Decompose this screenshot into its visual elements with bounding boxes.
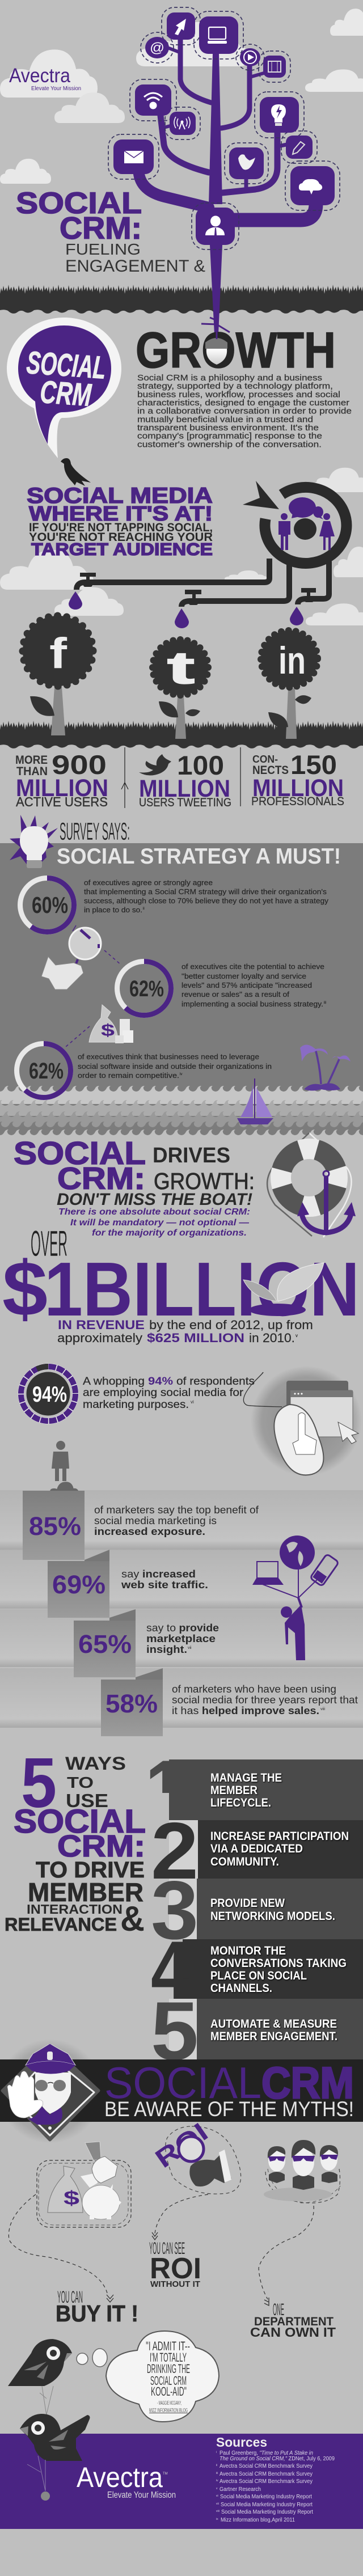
heading: 5 ways to use social CRM: CRM: [57,1829,145,1863]
text: 58 percent: it has helped improve sales. [172,1705,319,1716]
stat ring: 62 percent competitive: 62% [29,1059,64,1084]
myth 2: ROI magnifier [150,2117,241,2194]
stat: Facebook 900 million: ACTIVE USERS [16,794,108,809]
text: 62 percent customer loyalty [182,963,326,1008]
icon: magnifier with hand [41,925,101,989]
text: 65 percent: marketplace [146,1633,216,1644]
tree: Facebook: f [49,629,67,678]
myth 3 label: one department can own it [250,2300,336,2340]
executive right [320,2145,338,2183]
tree: LinkedIn [261,631,318,739]
clouds: sky top [0,9,363,184]
myth 3 label: one department can own it: ONE [273,2300,284,2319]
water drops [69,591,303,628]
text: 62 percent customer loyalty: of executives cite the potential to achieve [182,963,324,971]
icon: at sign: @ [150,40,164,56]
stat: LinkedIn 150 million: PROFESSIONALS [251,795,344,808]
icon: bird [229,147,264,179]
myth 2 label: you can see ROI without it [149,2239,201,2289]
heading: over $1 billion: OVER [31,1223,67,1264]
logo: Avectra footer: TM [163,2472,168,2476]
leaf [30,696,54,716]
title: Social CRM fueling engagement: CRM: [60,210,142,246]
heading: 5 ways to use social CRM: USE [66,1790,108,1811]
text: 60 percent: of executives agree or strongly agree [84,879,213,887]
text: 94 percent [83,1375,255,1411]
stat disc: 94 percent: 94% [32,1382,67,1407]
text: SURVEY SAYS: [60,818,130,845]
tag: 69 percent: 69% [52,1570,105,1599]
text block: definition of Social CRM: Social CRM is a philosophy and a business [137,373,322,383]
icon: woman [319,513,335,550]
text: 60 percent: that implementing a Social CRM strategy will drive their organization's [84,888,327,896]
thought cloud: quote: SOCIAL CRM [150,2374,187,2388]
thought bubbles [77,2349,107,2367]
clouds: middle [0,468,363,625]
icon: speech bubbles [289,497,323,519]
fold shadows between tags [85,1550,163,1680]
heading: 5 ways to use social CRM: SOCIAL [14,1803,146,1840]
sources: vi [216,2494,218,2498]
dashed path: myth 3 [259,2206,314,2299]
text: 62 percent competitive: iv [180,1073,182,1076]
text: 94 percent: A whopping [83,1375,145,1388]
bird on heading [61,458,91,486]
myth 2 label: you can see ROI without it: WITHOUT IT [150,2279,200,2289]
heading: GROWTH with acorn: GROWTH [136,322,336,378]
heading: social media where it's at: WHERE IT'S AT! [29,502,213,525]
icon: lifebuoy and anchor [267,1133,356,1237]
sources: Paul Greenberg, "Time to Put A Stake in [220,2450,313,2456]
step 3: networking [151,1864,363,1956]
sources: vii [216,2502,219,2506]
text: 94 percent: vi [191,1399,194,1405]
text block: definition of Social CRM: characteristics, designed to engage the customer [137,398,349,408]
icon: chevron myth 3 [264,2298,269,2306]
stat: Twitter 100 million: 100 [177,750,224,780]
text block: definition of Social CRM: company's [programmatic] response to the [137,432,322,441]
panel: myths band: SOCIAL [104,2058,261,2108]
stat: LinkedIn 150 million: MILLION [252,775,344,802]
stat: Facebook 900 million [15,750,108,809]
icon: man [278,513,290,550]
stat: Twitter 100 million [139,750,231,809]
heading: social media where it's at: IF YOU'RE NOT TAPPING SOCIAL, [29,521,213,534]
tag: 85 percent [23,1491,85,1560]
text block: definition of Social CRM: strategy, supported by a technology platform, [137,382,333,391]
title: Social CRM fueling engagement: SOCIAL [16,187,142,220]
text: 94 percent: 94% [148,1375,173,1388]
grass band trees [0,721,363,750]
text: 85 percent [94,1504,259,1537]
sources: Social Media Marketing Industry Report [221,2509,313,2515]
stat: Facebook 900 million: MILLION [16,775,108,802]
step 5: automate: MEMBER ENGAGEMENT. [210,2030,337,2043]
icon: person on cloud [29,1441,81,1503]
text: 62 percent competitive: social software inside and outside their organizations in [78,1063,272,1071]
heading: 5 ways to use social CRM [5,1744,146,1939]
target audience ring with arrow [243,481,347,563]
myth 1 label: you can buy it [56,2288,138,2327]
text: in revenue: v [296,1333,298,1338]
leaves [268,695,311,727]
text: 62 percent customer loyalty: iii [324,1001,326,1005]
panel: survey section background [0,843,363,1136]
stat: Twitter 100 million: MILLION [139,775,230,802]
text: 94 percent: are employing social media for [83,1386,244,1399]
text: 85 percent: of marketers say the top benefit of [94,1504,259,1516]
step 4: monitor: MONITOR THE [210,1944,286,1957]
icon: film strip [263,56,286,78]
sources: i [216,2451,217,2454]
tree: Twitter: t [167,642,195,693]
heading: 5 ways to use social CRM: RELEVANCE [5,1914,117,1935]
text: 60 percent: ii [143,907,145,911]
stat: LinkedIn 150 million [251,750,344,808]
text: in revenue: by the end of 2012, up from [149,1318,313,1332]
step 2: participation: COMMUNITY. [210,1855,279,1868]
thought cloud: quote: I'M TOTALLY [150,2350,187,2364]
logo: Avectra: Elevate Your Mission [31,85,81,92]
text: 65 percent: vii [188,1646,192,1650]
myth 1 label: you can buy it: YOU CAN [57,2288,83,2307]
sources: The Ground on Social CRM," ZDNet, July 6, 2009 [220,2456,335,2462]
text: YOU CAN SEE [149,2239,185,2258]
sources: Social Media Marketing Industry Report [220,2494,312,2500]
face [35,2072,71,2114]
text: 85 percent: social media marketing is [94,1515,217,1526]
heading: social CRM drives growth: It will be mandatory — not optional — [70,1218,250,1228]
stat ring: 60 percent [20,878,74,932]
text: 65 percent: insight. [146,1644,187,1655]
dashed arrow: money bag to ring [66,1026,90,1047]
policeman halo [0,2039,102,2143]
myth 1: money bag and piggy bank: $ [64,2188,79,2209]
panel: myths band [0,2058,363,2122]
thought cloud: quote: KOOL-AID" [151,2384,187,2399]
top bird [8,2339,72,2416]
text: 62 percent customer loyalty: revenue or sales" as a result of [182,991,290,999]
text: 62 percent customer loyalty: "better customer loyalty and service [182,972,306,980]
heading: social CRM drives growth: DRIVES [153,1144,230,1168]
stat ring: 62 percent customer loyalty [117,962,171,1015]
panel: footer [0,2434,363,2529]
step 2: participation: 2 [151,1806,199,1896]
sources: v [216,2487,218,2490]
step 5: automate: 5 [151,1985,199,2077]
icon: pen [286,136,313,159]
step 1: manage lifecycle: MEMBER [210,1784,258,1797]
speech bubble: Social CRM: SOCIAL [26,344,107,386]
icon: play button [240,48,260,66]
stat: Twitter 100 million: USERS TWEETING [139,796,231,809]
heading: 5 ways to use social CRM: TO [67,1774,94,1791]
sources: iv [216,2479,218,2482]
text: 60 percent: in place to do so. [84,906,142,914]
text: 69 percent: web site traffic. [121,1579,208,1591]
sources: Mizz Information blog,April 2011 [221,2517,295,2523]
tag: 65 percent [74,1621,136,1677]
tree: LinkedIn: in [278,639,306,682]
step 2: participation [151,1806,363,1896]
sunglasses [35,2080,48,2091]
text: 58 percent: of marketers who have been using [172,1684,336,1695]
step 5: automate: AUTOMATE & MEASURE [210,2017,337,2031]
icon: plant over the O [243,1263,324,1316]
thought cloud: quote: MIZZ INFORMATION BLOG [149,2408,188,2414]
text: 69 percent [121,1568,208,1591]
myth 2 label: you can see ROI without it: ROI [150,2252,201,2285]
step 4: monitor: 4 [151,1924,189,2016]
thought cloud: quote [106,2331,219,2422]
text: 62 percent competitive [78,1053,272,1080]
title: Social CRM fueling engagement [16,187,205,276]
tag: 65 percent: 65% [78,1630,132,1659]
sources: Gartner Research [220,2486,261,2493]
waves [0,1085,363,1136]
executive centre [292,2140,315,2190]
heading: 5 ways to use social CRM: MEMBER [28,1877,143,1907]
text: 85 percent: increased exposure. [94,1526,205,1537]
text: 65 percent [146,1622,219,1655]
step 3: networking: PROVIDE NEW [210,1897,285,1910]
text: 94 percent: marketing purposes. [83,1398,189,1411]
panel: myths band: CRM [261,2058,354,2108]
title: Social CRM fueling engagement: ENGAGEMENT & [65,257,205,276]
dashed outlines around icons [108,7,340,249]
step 2: participation: INCREASE PARTICIPATION [210,1830,349,1843]
text: in revenue: IN REVENUE [58,1318,145,1332]
sources: Social Media Marketing Industry Report [221,2502,313,2508]
text block: definition of Social CRM: customer's ownership of the conversation. [137,439,322,449]
stat ring: 60 percent: 60% [32,892,68,918]
text block: definition of Social CRM: transparent business environment. It's the [137,423,319,433]
heading: over $1 billion [2,1223,360,1333]
step 2: participation: VIA A DEDICATED [210,1842,303,1855]
tag: 58 percent [101,1680,163,1736]
speech bubble: Social CRM: CRM [39,374,93,413]
sources: Sources [216,2435,267,2450]
root dividers [121,747,240,808]
sources [216,2435,335,2523]
sources: ii [216,2464,217,2467]
tree: technology icons [108,7,340,340]
heading: 5 ways to use social CRM: 5 [21,1744,57,1822]
text: 65 percent: say to provide [146,1622,219,1634]
icon: antenna [170,112,196,135]
text: in revenue [57,1318,313,1345]
stat: LinkedIn 150 million: 150 [290,750,337,780]
text: 62 percent customer loyalty: implementing a social business strategy. [182,1000,323,1008]
text block: definition of Social CRM: mutually beneficial value in a trusted and [137,414,313,424]
bottom bird [20,2414,90,2501]
heading: 5 ways to use social CRM: TO DRIVE [36,1858,145,1883]
step 1: manage lifecycle: LIFECYCLE. [210,1796,271,1809]
logo: Avectra footer: Elevate Your Mission [107,2490,176,2500]
text block: definition of Social CRM [137,373,352,449]
heading: social media where it's at: SOCIAL MEDIA [27,484,213,508]
heading: social CRM drives growth: for the majority of organizations. [92,1228,247,1238]
myth 3 label: one department can own it: CAN OWN IT [250,2325,336,2340]
myth 1: money bag and piggy bank [37,2142,131,2227]
icon: chevron myth 1 [107,2295,113,2302]
icon: envelope [113,139,154,174]
stat: LinkedIn 150 million: NECTS [252,764,289,777]
stat ring: 62 percent customer loyalty: 62% [129,976,164,1001]
myth 3: three executives [264,2140,340,2203]
pipes and faucets [77,559,329,607]
text block: definition of Social CRM: business rules, workflow, processes and social [137,390,340,399]
thought cloud: quote: "I ADMIT IT-- [146,2339,190,2353]
heading: social CRM drives growth: CRM: [57,1161,145,1196]
text: 94 percent: of respondents [176,1375,255,1388]
heading: social strategy a must: SOCIAL STRATEGY A MUST! [57,844,341,869]
text: in revenue: in 2010. [249,1331,295,1345]
title: Social CRM fueling engagement: FUELING [65,240,141,258]
icon: sailboat [237,1078,273,1124]
myth 1 label: you can buy it: BUY IT ! [56,2300,138,2327]
text: 60 percent: success, although close to 70% believe they do not yet have a strategy [84,897,329,905]
thought cloud: quote: - MAGGIE MCGANY, [157,2400,182,2406]
dashed arrow: magnifier to ring [104,950,121,965]
icon: person carried by device balloons [252,1536,339,1660]
text: in revenue: approximately [57,1331,142,1345]
icon: policeman stop sign [2,2044,99,2140]
tree: Twitter [153,640,208,739]
icon: palm island [300,1044,351,1091]
logo: Avectra footer: Avectra [77,2461,163,2493]
thought cloud: quote: DRINKING THE [147,2362,190,2376]
text: 62 percent customer loyalty: levels" and 57% anticipate "increased [182,982,312,989]
text: 60 percent [84,879,329,914]
sources: ix [216,2518,218,2521]
heading: social media where it's at: TARGET AUDIENCE [31,539,213,559]
sources: viii [216,2510,220,2513]
heading: 5 ways to use social CRM: INTERACTION [27,1902,123,1917]
step 1: manage lifecycle: MANAGE THE [210,1771,282,1784]
text: 58 percent [172,1684,358,1716]
heading: social CRM drives growth: SOCIAL [14,1135,146,1171]
heading: social CRM drives growth: There is one absolute about social CRM: [58,1207,250,1217]
icon: wifi [135,84,171,116]
step 1: manage lifecycle: 1 [145,1743,186,1835]
grass band top [0,285,363,315]
step 4: monitor [151,1924,363,2016]
stat: LinkedIn 150 million: CON- [252,754,278,765]
sources: Avectra Social CRM Benchmark Survey [220,2471,313,2477]
hand [7,2071,43,2118]
heading: social media where it's at: YOU'RE NOT REACHING YOUR [29,531,213,544]
sources: Avectra Social CRM Benchmark Survey [220,2478,313,2485]
heading: 5 ways to use social CRM: & [120,1900,145,1939]
dashed path: myth 2 [155,2194,208,2234]
text: 58 percent: viii [320,1707,326,1711]
sources: Avectra Social CRM Benchmark Survey [220,2463,313,2469]
tag: 58 percent: 58% [105,1689,158,1718]
icon: light bulb [260,97,299,133]
step 4: monitor: CONVERSATIONS TAKING [210,1957,347,1970]
tree trunk and branches [139,40,316,340]
icon: mouse and browser windows [243,1366,362,1476]
step 3: networking: NETWORKING MODELS. [210,1910,335,1923]
tag: 69 percent [48,1561,109,1618]
step 5: automate [151,1985,363,2077]
text: 58 percent: social media for three years report that [172,1694,358,1706]
tag: 85 percent: 85% [29,1512,81,1541]
heading: social CRM drives growth: GROWTH: [154,1168,255,1194]
text: 62 percent competitive: of executives think that businesses need to leverage [78,1053,259,1061]
step 4: monitor: CHANNELS. [210,1982,272,1995]
heading: social media where it's at [27,484,213,559]
icon: person [196,208,235,245]
text: 69 percent: say increased [121,1568,196,1580]
step 1: manage lifecycle [150,1759,363,1820]
step 4: monitor: PLACE ON SOCIAL [210,1969,307,1982]
anchor [297,1171,356,1233]
panel: ribbon bands [0,1490,363,1728]
stat: Facebook 900 million: THAN [16,765,48,778]
logo: Avectra: Avectra [9,65,70,87]
executive left [268,2146,285,2183]
icon: cloud speech [290,166,335,205]
sources: iii [216,2472,218,2475]
icon: arrow cursor [167,12,195,40]
stat ring: 62 percent competitive [17,1043,70,1098]
stat disc: 94 percent [21,1367,75,1421]
icon: twitter bird [139,754,171,776]
leaves [159,701,200,717]
shirt [28,2105,62,2125]
heading: over $1 billion: $ [2,1246,48,1333]
icon: chevron myth 2 [152,2232,158,2240]
text: 62 percent competitive: order to remain competitive. [78,1072,179,1080]
text block: definition of Social CRM: in a collaborative conversation in order to provide [137,407,352,416]
icon: light bulb with rays [10,815,58,868]
icon: money bag and coins: $ [101,1021,115,1040]
stat: Facebook 900 million: 900 [52,750,107,780]
heading: 5 ways to use social CRM: WAYS [65,1753,126,1774]
police cap [26,2044,75,2065]
icon: at sign [145,37,169,58]
icon: laptop [199,16,238,54]
step 3: networking: 3 [151,1864,199,1956]
heading: social CRM drives growth: DON'T MISS THE BOAT! [57,1190,252,1209]
icon: money bag and coins [89,1005,133,1043]
tree: Facebook [23,616,93,735]
myth 3 label: one department can own it: DEPARTMENT [254,2315,334,2328]
dashed path: myth 1 [9,2194,108,2295]
stat: Facebook 900 million: MORE [15,754,48,767]
myth 2: ROI magnifier: ROI [150,2117,213,2173]
heading: social CRM drives growth [14,1135,255,1238]
text: in revenue: $625 MILLION [147,1331,244,1345]
speech bubble: Social CRM [7,318,121,458]
